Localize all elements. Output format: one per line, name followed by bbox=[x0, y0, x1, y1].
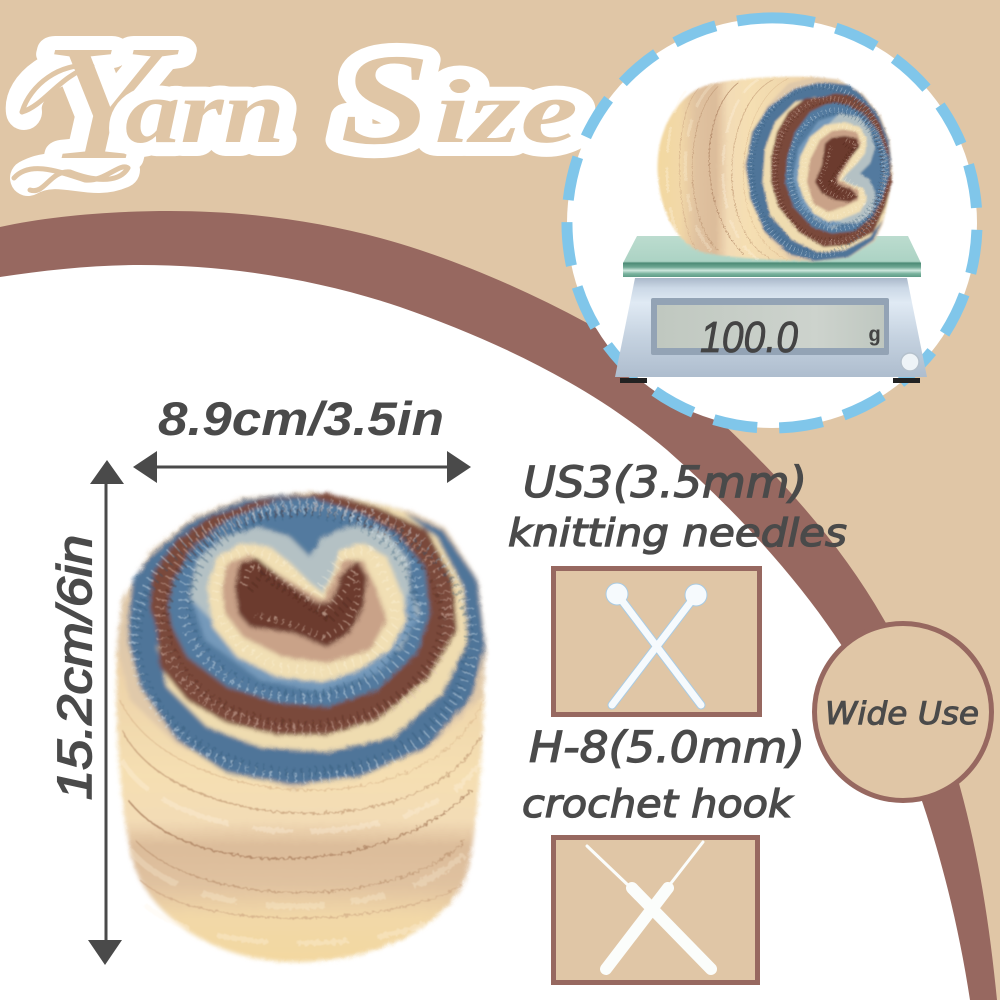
height label: 15.2cm/6in bbox=[49, 535, 102, 800]
title: Yarn Size bbox=[14, 11, 578, 194]
height arrow bbox=[88, 460, 124, 965]
title: Yarn Size: S bbox=[340, 28, 430, 172]
width arrow bbox=[133, 451, 471, 483]
scale display bbox=[651, 298, 889, 355]
scale body bbox=[615, 278, 927, 377]
scale photo circle bbox=[567, 18, 977, 428]
hook size label: H-8(5.0mm) bbox=[529, 723, 805, 773]
title: Yarn Size: Y bbox=[42, 11, 180, 194]
title: Yarn Size: arn bbox=[125, 63, 285, 162]
glass platform bbox=[623, 236, 921, 277]
white content panel bbox=[0, 265, 970, 1000]
wide use badge bbox=[814, 624, 992, 800]
hook type label: crochet hook bbox=[522, 782, 794, 826]
title: Yarn Size: ize bbox=[434, 63, 578, 162]
scale knob bbox=[901, 353, 919, 371]
main yarn cake bbox=[116, 492, 486, 962]
icon: crossed knitting needles bbox=[606, 583, 707, 705]
width label: 8.9cm/3.5in bbox=[158, 392, 444, 445]
badge text: Wide Use bbox=[825, 696, 979, 732]
title Y swash strokes bbox=[14, 66, 128, 191]
title backing behind Y swashes bbox=[24, 62, 122, 178]
scale feet bbox=[620, 378, 920, 383]
icon: crossed crochet hooks bbox=[587, 842, 711, 969]
brown curved band bbox=[0, 211, 997, 1000]
display reading: 100.0 bbox=[700, 313, 798, 362]
knitting needles box bbox=[554, 568, 760, 714]
circle white fill bbox=[567, 18, 977, 428]
crochet hook box bbox=[554, 838, 758, 982]
yarn on scale bbox=[658, 77, 892, 262]
needle type label: knitting needles bbox=[508, 511, 847, 555]
needle size label: US3(3.5mm) bbox=[523, 458, 807, 508]
kitchen scale bbox=[615, 236, 927, 383]
dashed blue ring bbox=[567, 18, 977, 428]
display unit: g bbox=[868, 325, 881, 348]
